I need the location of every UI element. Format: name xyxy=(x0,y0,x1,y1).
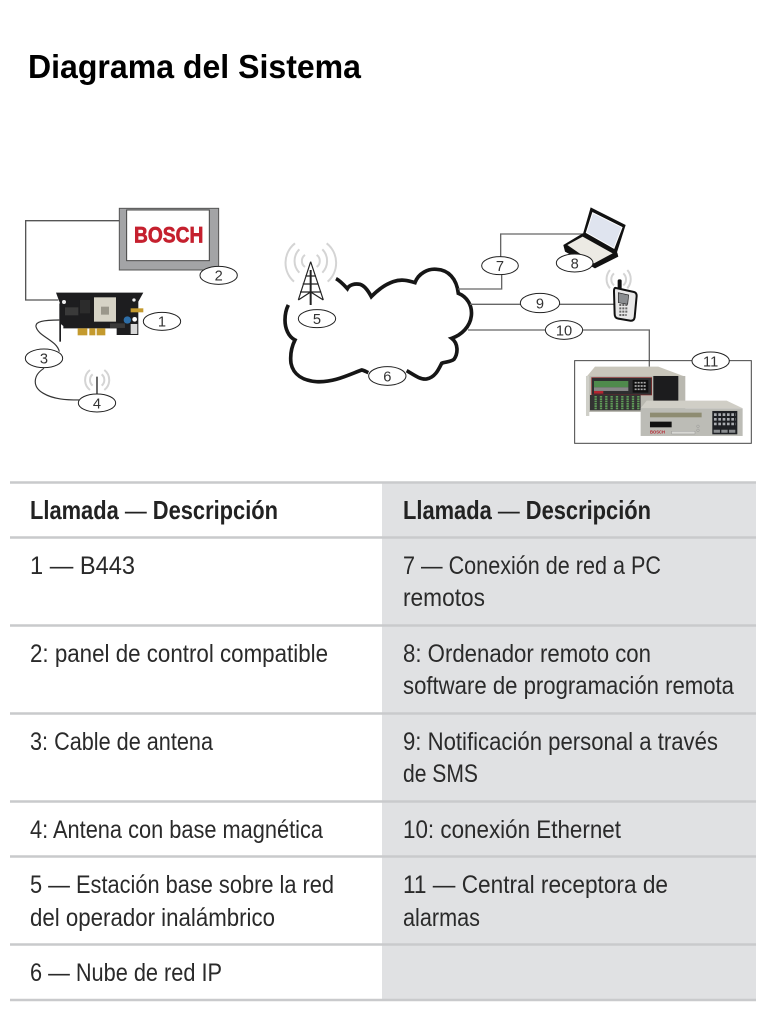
icon: control panel: BOSCH xyxy=(134,222,203,247)
right column text: 7 — Conexión de red a PC xyxy=(403,552,661,580)
diagram: left panel and board xyxy=(25,208,237,412)
right column background xyxy=(382,482,756,1000)
callout 4 xyxy=(78,394,116,412)
icon: desktop receiver unit: BOSCH xyxy=(650,429,665,434)
callout 4: 4 xyxy=(93,396,101,412)
callout 5: 5 xyxy=(313,312,321,328)
callout 11 xyxy=(692,352,729,370)
diagram: base station and IP network cloud xyxy=(285,243,471,385)
callout 2: 2 xyxy=(215,269,223,285)
callout 1: 1 xyxy=(158,315,166,331)
right column text: remotos xyxy=(403,584,485,612)
left column text xyxy=(30,495,334,987)
right column text: software de programación remota xyxy=(403,672,734,700)
alarm receiver box xyxy=(575,361,751,443)
callout 7: 7 xyxy=(496,259,504,275)
connection line: panel to board xyxy=(26,221,119,300)
antenna cable xyxy=(35,320,79,400)
icon: B443 circuit board xyxy=(56,293,143,342)
callout 3: 3 xyxy=(40,352,48,368)
callout 2 xyxy=(200,266,237,285)
icon: control panel xyxy=(119,208,219,270)
callout 10: 10 xyxy=(556,323,572,339)
callout 7 xyxy=(482,257,518,275)
icon: rack receiver unit xyxy=(586,367,685,416)
callout 11: 11 xyxy=(703,354,718,370)
legend table xyxy=(10,482,756,1000)
callout 8: 8 xyxy=(571,256,579,272)
right column text xyxy=(403,495,734,932)
icon: magnetic antenna xyxy=(85,370,109,394)
right column text: 11 — Central receptora de xyxy=(403,871,668,899)
callout 8 xyxy=(556,254,593,272)
right column text: 9: Notificación personal a través xyxy=(403,728,718,756)
icon: cell tower xyxy=(286,243,336,305)
callout 6 xyxy=(369,367,406,385)
callout 5 xyxy=(298,310,336,328)
cloud outline xyxy=(285,269,471,382)
left column text: del operador inalámbrico xyxy=(30,904,275,932)
right column text: 10: conexión Ethernet xyxy=(403,816,621,844)
right column text: alarmas xyxy=(403,904,480,932)
right column text: Llamada — Descripción xyxy=(403,495,651,525)
callout 3 xyxy=(25,349,63,368)
icon: laptop xyxy=(563,207,626,268)
icon: mobile phone xyxy=(607,270,637,321)
left column text: 5 — Estación base sobre la red xyxy=(30,871,334,899)
callout 9 xyxy=(520,293,560,313)
title: Diagrama del Sistema xyxy=(28,48,362,85)
callout 1 xyxy=(143,312,181,331)
callout 6: 6 xyxy=(383,369,391,385)
icon: desktop receiver unit xyxy=(641,401,743,436)
left column text: Llamada — Descripción xyxy=(30,495,278,525)
diagram: remote devices xyxy=(458,207,751,443)
callout 9: 9 xyxy=(536,296,544,312)
table rules xyxy=(10,482,756,1000)
left column text: 4: Antena con base magnética xyxy=(30,816,323,844)
left column text: 2: panel de control compatible xyxy=(30,640,328,668)
network connection lines xyxy=(458,234,649,367)
right column text: de SMS xyxy=(403,760,478,788)
left column text: 3: Cable de antena xyxy=(30,728,213,756)
right column text: 8: Ordenador remoto con xyxy=(403,640,651,668)
left column text: 1 — B443 xyxy=(30,552,135,580)
left column text: 6 — Nube de red IP xyxy=(30,959,222,987)
callout 10 xyxy=(545,321,583,339)
